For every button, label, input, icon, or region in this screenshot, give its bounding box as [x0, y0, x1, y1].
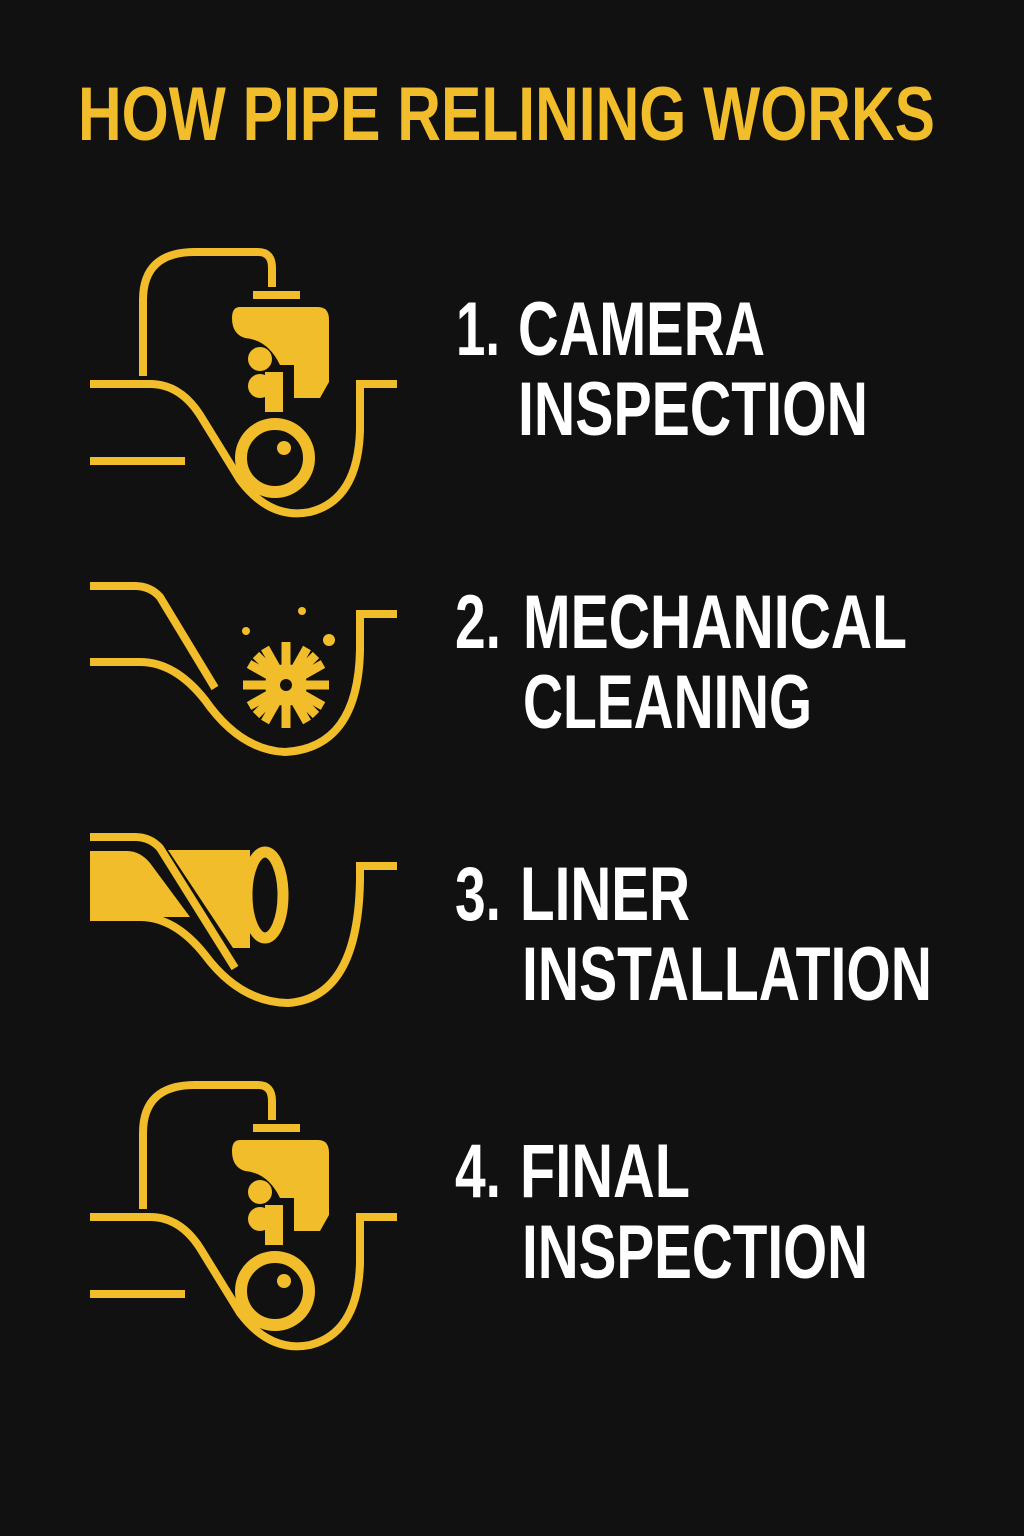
- heading: step 4: [455, 1129, 868, 1295]
- heading: step 1: 1.: [456, 287, 500, 372]
- heading: step 3: 3.: [455, 852, 501, 937]
- heading: step 1: INSPECTION: [518, 367, 868, 452]
- heading: step 2: [455, 580, 907, 745]
- heading: step 1: CAMERA: [518, 287, 765, 372]
- icon: camera inspection: [90, 252, 397, 513]
- heading: step 2: CLEANING: [523, 660, 812, 745]
- icon: mechanical cleaning: [90, 586, 397, 752]
- heading: step 4: FINAL: [520, 1129, 690, 1214]
- heading: step 4: 4.: [455, 1129, 501, 1214]
- heading: step 3: [455, 852, 932, 1017]
- heading: step 3: LINER: [520, 852, 690, 937]
- icon: liner installation: [90, 837, 397, 1003]
- icon: final inspection: [90, 1085, 397, 1346]
- heading: step 2: MECHANICAL: [523, 580, 907, 665]
- heading: step 4: INSPECTION: [522, 1210, 868, 1295]
- heading: step 2: 2.: [455, 580, 501, 665]
- heading: step 1: [456, 287, 868, 452]
